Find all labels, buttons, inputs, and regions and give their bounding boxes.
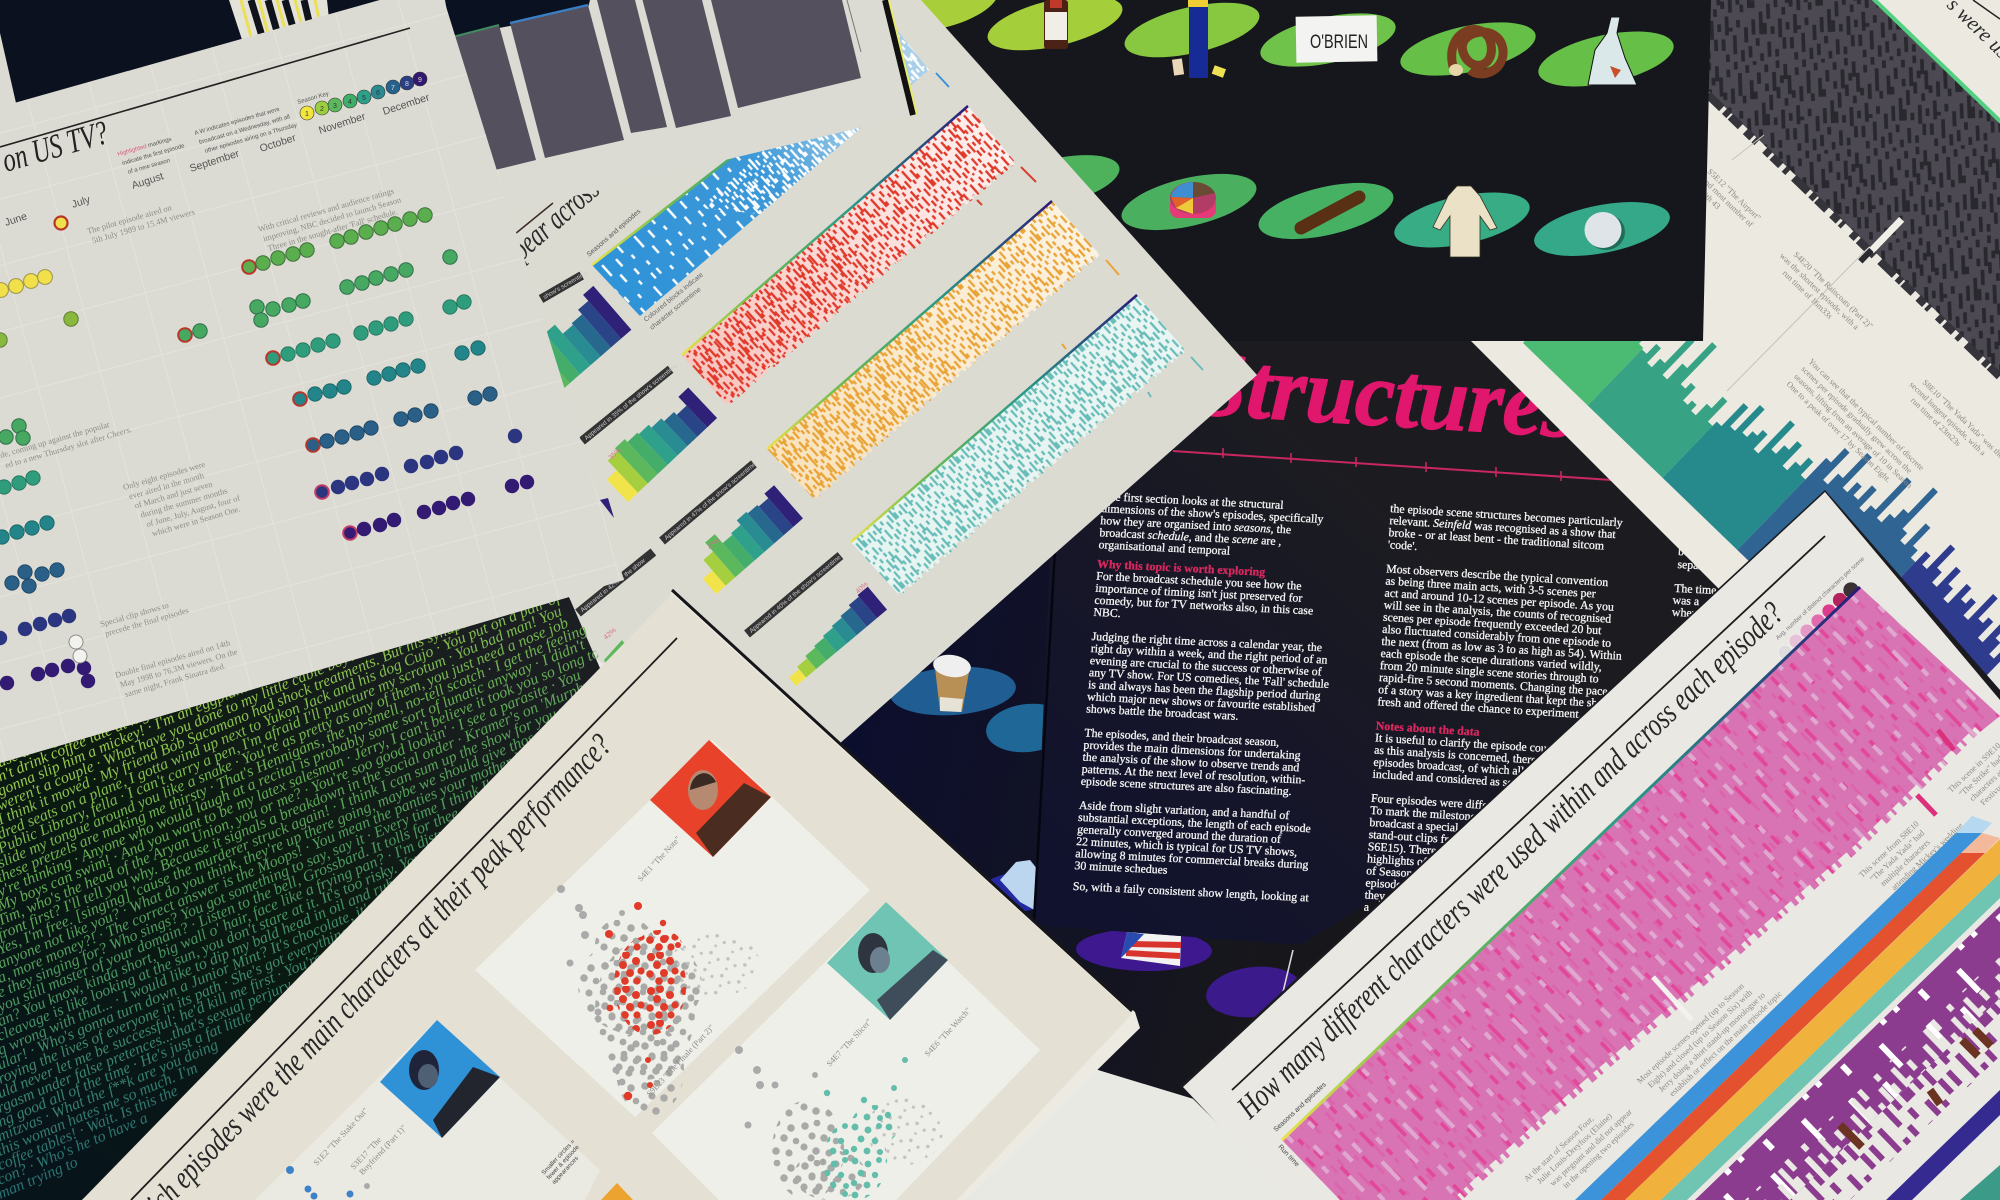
label: appeared in percentage 3: Appeared in 47% of the show's screentime [663,461,758,542]
icon: goldfish bag [1534,17,1678,97]
quote lines: mitzvas · What the f**k are you doing [0,1037,221,1145]
legend: season key: Season Key [297,91,330,106]
legend: season key: 7 [391,85,395,92]
annotation: eight episodes: during the summer months [139,486,228,520]
text column 2: will see in the analysis, the counts of recognised [1383,598,1612,626]
photo: Jerry [380,1020,500,1138]
icon: trench coat [1390,182,1534,258]
legend: season key: 9 [418,77,422,84]
annotation: Julia pregnant: in the opening two episodes [1561,1120,1636,1190]
text column 1: For the broadcast schedule you see how the [1096,569,1302,593]
text column 3 fragment: when [1672,605,1698,620]
icon: partial green oval [986,145,1124,219]
annotation: eight episodes: of March and just seven [134,479,214,510]
text column 1: 22 minutes, which is typical for US TV shows, [1076,834,1298,859]
label: appeared in percentage 4: Appeared in 42% of the show [579,557,647,614]
episode dots: season 6 [0,341,485,544]
icon: hot sauce bottle [983,0,1127,61]
annotation: eight episodes: ever aired in the month [128,471,206,501]
panel: Jerry scatter [255,1020,600,1200]
sheet: Structures text page [800,320,1800,1100]
title rule [0,28,410,147]
quote lines: roying the lives of everyone in its path · She's got everything [0,923,352,1088]
annotation: Julia pregnant: was pregnant and did not appear [1548,1107,1634,1188]
text column 1: provides the main dimensions for undertaking [1083,738,1301,762]
episode dots: season 5 [0,295,471,494]
episode dots: clip shows [69,635,87,663]
text column 2: episodes broadcast, of which all were [1373,755,1550,780]
quote lines: gonna slip him a mickey! · I'm an eggplant! I'm an egg [0,649,320,800]
annotation: Thursday slot: ed to a new Thursday slot after Cheers. [4,425,133,470]
text column 2: included and considered as scenes [1372,767,1534,791]
annotation: eight episodes: which were in Season One. [151,504,241,538]
text: strip labels [586,208,705,332]
icon: golf ball [1530,192,1674,266]
episode dots: season 9 [0,475,534,690]
text column 2: also fluctuated considerably from one episode to [1382,622,1612,650]
text column 2: scenes per episode frequently exceeded 20 but [1383,610,1603,637]
text: strip labels: Coloured blocks indicate [643,271,705,324]
annotation: The Raincoats: run time of 16m33s [1781,269,1834,321]
quote lines: ular! · Who's gonna turn down a Junior Mint? It's chocolate, it's [0,899,376,1073]
annotation: Yada Yada scene: attending Mickey's wedding [1890,821,1966,892]
text column 1: the analysis of the show to observe trends and [1082,750,1300,774]
note: highlighted markings: of a new season [127,158,171,176]
note: W indicates Wednesday: A W indicates episodes that were [194,107,281,137]
text column 1: Aside from slight variation, and a handful of [1079,798,1290,822]
icon: lime oval fragment [876,0,1004,42]
month labels: October [258,132,298,155]
note: W indicates Wednesday: other episodes airing on a Thursday [204,123,298,155]
label: 35%: 35% [608,447,623,461]
annotation: pilot: 5th July 1989 to 15.4M viewers [91,207,196,245]
quote lines: Yes, I'm free. [singing] 'cause the murderer struck again! · I think I can sum up the show for you with [0,693,588,958]
label: run time: Run time [1277,1144,1300,1168]
label: The Note: S4E1 "The Note" [636,834,682,883]
photo: Elaine fragment [601,1183,633,1200]
quote lines: g wrong with that... · I would like to dip my bald head in oil and rub [0,875,397,1059]
text column 1: broadcast schedule, and the scene are , [1099,525,1282,548]
quote lines: use doling out the pellets late at night [0,662,221,771]
quote lines: y're thinking · Anyone who would laugh at a recital is probably some sort of lunatic anyway · I didn't [0,636,588,901]
text column 1: NBC. [1093,605,1121,620]
annotation: Julia pregnant: Julie Louis-Dreyfuss (Elaine) [1535,1111,1614,1186]
icon: Pez dispenser [1120,0,1264,78]
text column 1: comedy, but for TV networks also, in this case [1094,593,1314,618]
text column 2: stand-out clips from [1368,827,1464,847]
text column 2: broadcast a special of [1369,815,1472,835]
note: W indicates Wednesday: broadcast on a Wednesday, with all [199,114,291,146]
note: highlighted markings: Highlighted [117,144,147,158]
strip: purple sparse blocks [1790,998,2000,1200]
month labels: August [130,170,165,192]
icon: flag on purple oval [1076,928,1212,972]
text column 2: of Season [1366,863,1413,880]
strip: purple dense blocks [1695,906,2000,1200]
label: The Finale: S9E23 "The Finale (Part 2)" [645,1023,716,1098]
quote lines: n't drink coffee late at night, it keeps me up [0,663,253,785]
episode dots: season 4 [0,250,457,445]
strip: red character [682,106,1036,406]
quote lines: ng good all of the time · He's just a fat little [0,1008,255,1131]
text column 2: as this analysis is concerned, there were 180 [1374,743,1583,769]
episode dots: season 1 [0,216,68,297]
annotation: typical number of scenes: One to a peak of over 17 by Season Eight. [1785,380,1893,484]
text column 1: substantial exceptions, the length of each episode [1078,810,1311,835]
label: 47%: 47% [707,537,722,551]
quote lines: slide my tongue around you like a snake · You're as pretty as any of them, you just need a nose job [0,614,571,872]
label: The Slicer: S4E7 "The Slicer" [825,1017,874,1068]
legend: season key: 6 [376,90,380,97]
text column 1: 30 minute schedues [1074,858,1168,877]
sheet: main-character screentime strips [500,0,1257,745]
strip: red solid band [1601,853,1985,1200]
label: appeared in percentage 2: Appeared in 35% of the show's screentime [583,362,679,442]
quote lines: this woman hates me so much. I'm [0,1060,200,1160]
text column 1: episode scene structures are also fascinating. [1080,774,1292,798]
quote lines: front first? I'll tell you why. Because it signals a breakdown in the social order · Kramer's on 'Murphy [0,676,594,944]
annotation: eight episodes: Only eight episodes were [122,460,206,492]
quote lines: anyone not like you? · What do you think, they're up there going, maybe we should give those [0,727,544,972]
text column 2: from 20 minute single scene stories through to [1379,658,1599,686]
heading: Structures: Structures [1195,332,1580,457]
strip: teal solid band [1661,873,2000,1200]
quote lines: rgasm under false pretences...that's sexual perjury [0,976,295,1117]
text column 1: allowing 8 minutes for commercial breaks during [1075,846,1309,872]
title rule [1973,0,2000,19]
annotation: pilot: The pilot episode aired on [86,203,173,236]
chart: pink scene heatmap [1282,587,2000,1200]
text column 3 fragment: The time [1674,581,1717,597]
annotation: stand-up monologue: Most episode scenes opened (up to Season [1635,981,1746,1085]
chart: season bars 2 [595,383,717,502]
icon: partial blue oval [984,700,1072,756]
chart: George red dots [605,902,686,1100]
annotation: Yada Yada scene: This scene from S8E10 [1857,819,1921,879]
sheet: dark quotes typography poster [0,597,600,1200]
annotation: The Yada Yada: second longest episode, with a [1908,380,1987,458]
icon: pretzel [1396,12,1540,86]
chart: Kramer teal dots [823,1057,908,1200]
legend: season key: 5 [362,95,366,102]
text column 2: as being three main acts, with 3-5 scenes per [1385,573,1596,601]
episode dots: season 8 [0,429,522,645]
heading: on US TV?: on US TV? [0,114,112,180]
quote lines: a, more money?! · The correct answer is the Moops! · You mean the panties your mother laid out [0,733,564,987]
chart: season bars 3 [686,484,803,594]
label: appeared in percentage 1: show's screentime [542,269,590,301]
annotation: typical number of scenes: scenes per episode gradually grew across the [1799,365,1914,476]
note: smaller circles: appearances [551,1155,580,1186]
note: smaller circles: Smaller circles = [540,1138,577,1176]
heading: how many different characters: How many different characters were used within and across each episode? [1230,595,1791,1126]
text column 2: act and around 10-12 scenes per episode. As you [1384,586,1614,614]
text sheet with columns [1034,330,1800,945]
annotation: The Yada Yada: run time of 23m23s [1909,396,1963,448]
annotation: typical number of scenes: seasons, lifting from an average of 10 in Season [1792,372,1914,491]
text column 1: is and always has been the flagship period during [1088,677,1321,703]
text column 2: the episode scene structures becomes particularly [1390,501,1623,529]
episode dots: season 2 [0,312,78,347]
annotation: stand-up monologue: establish or reflect on the main episode topic [1668,989,1784,1098]
photo: Kramer [827,902,948,1020]
sheet: scene bars and grey heatmap, right [1379,0,2000,760]
strip: green band corner [1960,1165,2000,1200]
note: smaller circles: fewer & episode [545,1144,581,1181]
sheet: grey bars print top centre [439,0,917,212]
text column 2: rapid-fire 5 second moments. Changing the pace [1379,670,1608,698]
legend: characters per scene: Avg. number of distinct characters per scene [1775,556,1867,641]
text column 2: highlights of the [1367,851,1445,870]
quote lines: e they singing for? Who sings? You got something to say, say it · Every time I think I'm out [0,763,527,1001]
month labels: November [317,110,367,137]
strip: indigo solid band [1886,1090,2000,1200]
text column 3 fragment: but not [1678,544,1712,560]
grey bar 2 [510,5,624,158]
sheet: props icons on black [876,0,1711,341]
episode dots: season 3 [242,208,432,274]
annotation: double final: Double final episodes aired on 14th [114,638,232,680]
black and yellow sheet edge [885,0,917,115]
chart: George grey dots [557,885,760,1116]
month labels: June [3,210,29,229]
annotation: double final: May 1998 to 76.3M viewers. On the [119,647,239,689]
quote lines: coffee tables! · Wait. Is this the [0,1082,181,1174]
dark top of bars [445,0,590,40]
photo: George [650,740,771,857]
quote lines [0,600,598,1199]
text column 2: S6E15). There were [1367,839,1463,859]
panel: Kramer scatter [652,902,1040,1200]
text column 3 fragment: was a [1672,593,1700,608]
text column 1: So, with a faily consistent show length, looking at [1072,879,1310,904]
text column 1: importance of timing isn't just preserved for [1095,581,1303,605]
text column 1: any TV show. For US comedies, the 'Fall' schedule [1089,665,1330,691]
sheet: dark print behind top left [0,0,460,140]
chart: grey scene heatmap [1583,0,2000,549]
note: highlighted markings: markings [146,137,172,150]
annotation: The Airport: S5E12 "The Airport" [1706,167,1763,222]
pink timeline rule [1173,448,1612,481]
chart: season bars 5 fragment [603,627,628,668]
annotation: The Airport: scenes, with 43 [1679,169,1722,211]
title rule [1232,536,1825,1090]
text column 2: fresh and offered the chance to experiment. [1377,694,1582,721]
text column 1: The episodes, and their broadcast season, [1084,726,1280,749]
annotation: typical number of scenes: You can see that the typical number of discrete [1807,357,1926,473]
sheet: NBC broadcast schedule calendar [0,0,624,770]
text column 1: Judging the right time across a calendar year, the [1091,629,1323,654]
quote lines: cleavage is like looking at the sun, you don't stare at it. It's too risky. You [0,849,425,1045]
annotation: double final: same night, Frank Sinatra died. [124,662,227,699]
quote lines: Public Library, fella · I can't carry a pen, I'm afraid I'll puncture my scrotum · You bad man! You [0,603,565,858]
annotation: Julia pregnant: At the start of Season Four, [1522,1114,1595,1183]
chart: season bars 4 [777,587,887,686]
icon: Trivial Pursuit wedge box [1116,163,1262,241]
text column 1: right day within a week, and the right period of an [1090,641,1328,667]
strip: blue solid band [1575,833,1982,1200]
text column 2: To mark the milestone the show [1370,803,1522,826]
annotation: eight episodes: of June, July, August, four of [145,493,241,529]
quote lines: My boys can swim! · And you want to be my latex salesman · Jerry, I can't believe it took you so long to [0,644,602,915]
label: The Boyfriend: S3E17 "The [349,1135,384,1171]
sheet: character heatmap, bottom right [1180,490,2000,1200]
chart: green scene count bars [1523,213,2000,735]
annotation: clip shows: precede the final episodes [104,606,190,638]
text column 3 fragment: separate [1677,557,1716,573]
text column 1: The first section looks at the structural [1102,489,1285,512]
chart: season bars 1 [501,286,631,410]
strip: band end blocks [1956,816,2000,853]
label: appeared in percentage 4 [575,548,656,616]
text column 2: each episode the scene durations varied wildly, [1380,646,1602,674]
text column 1: how they are organised into seasons, the [1100,513,1292,536]
annotation: The Raincoats: S4E20 "The Raincoats (Part 2)" [1792,250,1875,331]
quote lines: these pretzels are making me thirsty · That's Hennigans, the no-smell, no-tell scotch · I get the feeling [0,621,589,886]
text column 2: Most observers describe the typical convention [1386,561,1609,589]
grey bar 1 [452,25,536,170]
annotation: Fall schedule: improving, NBC decided to launch Season [262,195,403,243]
legend: season key: 1 [305,111,309,118]
grey bar 4 [642,0,731,128]
annotation: Fall schedule: With critical reviews and audience ratings [257,186,395,234]
annotation: stand-up monologue: Jerry doing a short stand-up monologue to [1657,991,1767,1094]
label: The Boyfriend: Boyfriend (Part 1)" [358,1123,408,1177]
strip: teal character [851,295,1203,596]
legend: season key: 2 [320,106,324,113]
strip: yellow solid band [1625,839,2000,1200]
annotation: clip shows: Special clip shows to [99,601,170,629]
panel: George scatter [475,740,870,1117]
chart: hidden bar fragment [600,498,614,518]
quote lines: I think it moved · My friend Bob Sacamano had shock treatments. But his synapses were [0,596,513,829]
text column 2: broke - or at least bent - the traditional sitcom [1388,525,1605,553]
annotation: The Airport: second most number of [1692,168,1755,229]
annotation: Yada Yada scene: multiple characters [1879,838,1932,888]
legend: season key [297,72,427,120]
text column 1: patterns. At the next level of resolution, within- [1081,762,1306,787]
text column 2: Four episodes were different. [1371,791,1509,813]
sheet: peak performance scatter plots [82,589,1140,1200]
heading fragment: appear across: pear across [502,170,606,267]
legend: season key: 8 [405,81,409,88]
title rule [515,203,553,234]
quote lines: an? You know, kinda short, big wall o' hair, face like a frying pan? · I'm disturbed [0,813,476,1030]
text column 1: organisational and temporal [1098,537,1231,558]
label: seasons and episodes: Seasons and episodes [1273,1081,1328,1133]
label: The Watch: S4E6 "The Watch" [923,1006,973,1058]
chart: season bars 5 fragment: 42% [603,627,618,641]
label: The Stake Out: S1E2 "The Stake Out" [312,1106,370,1167]
text: strip labels: Seasons and episodes [586,208,643,259]
text column 2: the next (from as low as 3 to as high as 54). Within [1381,634,1622,663]
month labels [3,91,431,229]
text column 1: evening are crucial to the success or otherwise of [1089,653,1322,678]
text column 1: dimensions of the show's episodes, specifically [1101,501,1324,526]
quote lines: you still master of your domain? · Listen to the bell, Grossbard. It tolls for thee · I'm disturbed [0,768,549,1016]
legend: season key: 4 [348,99,352,106]
leader lines [1727,135,1867,391]
text column 2: 'code'. [1387,537,1418,553]
strip: blue character [592,30,949,316]
text column 2: a [1363,900,1370,914]
text column 2: of a story was a key ingredient that kept the show [1378,682,1613,711]
month labels: September [188,147,241,175]
text column 1: generally converged around the duration of [1077,822,1281,846]
icon: O'Brien sign [1256,3,1400,77]
icon: O'Brien sign: O'BRIEN [1310,32,1368,53]
episode dots: season 7 [5,387,497,593]
annotation: The Raincoats: was the shortest episode, with a [1778,251,1861,332]
icon: baby t-shirt [976,860,1060,916]
annotation: Thursday slot: de, coming up against the popular [0,420,111,460]
label: 40%: 40% [855,581,870,595]
strip: orange character [767,201,1119,500]
text column 2: they [1364,887,1386,903]
annotation: Fall schedule: Three in the sought-after 'Fall' schedule. [267,207,399,253]
quote lines: Tim, who's the head of the Aryan Union, you or me? · You're soo good lookin' · I see a parasite · You [0,667,583,930]
icon: cigar [1253,172,1399,250]
note: highlighted markings: indicate the first episode [122,143,186,167]
grey bar 5 [711,0,861,108]
label: appeared in percentage 5: Appeared in 40% of the show's screentime [748,554,843,635]
legend: season key: 3 [333,103,337,110]
grey bar 3 [597,0,667,133]
month labels: July [70,193,92,211]
text column 2: episodes [1365,875,1407,892]
text column 1: Why this topic is worth exploring [1097,557,1266,579]
text column 1: which major new shows or favourite established [1087,689,1316,714]
text column 1: shows battle the broadcast wars. [1086,701,1239,723]
annotation: stand-up monologue: Eight) and closed (up to Season Six) with [1646,988,1755,1090]
text column 2: Notes about the data [1375,718,1480,739]
icon: coffee cup on blue oval [888,652,1018,719]
month labels: December [381,91,431,118]
quote lines: weren't a couple · What have you done to my little cable boy? · You know [0,619,426,814]
chart: Jerry dots [286,1166,370,1200]
chart: Kramer grey dots [735,1046,943,1200]
quote lines: dred seats on a plane, I gotta wind up next to Yukon Jack and his dog Cujo · You put on a pair of [0,588,565,843]
title rule [131,638,677,1200]
text: strip labels: character screentime [649,286,703,332]
quote lines: uld never let me be successful; he'd kill me first · You're [0,950,324,1102]
text column 2: relevant. Seinfeld was recognised as a show that [1389,513,1616,541]
text column 2: It is useful to clarify the episode count as far [1375,730,1585,757]
annotation: Yada Yada scene: "The Yada Yada" had [1868,828,1927,884]
icon: needle on purple oval [1204,950,1304,1022]
